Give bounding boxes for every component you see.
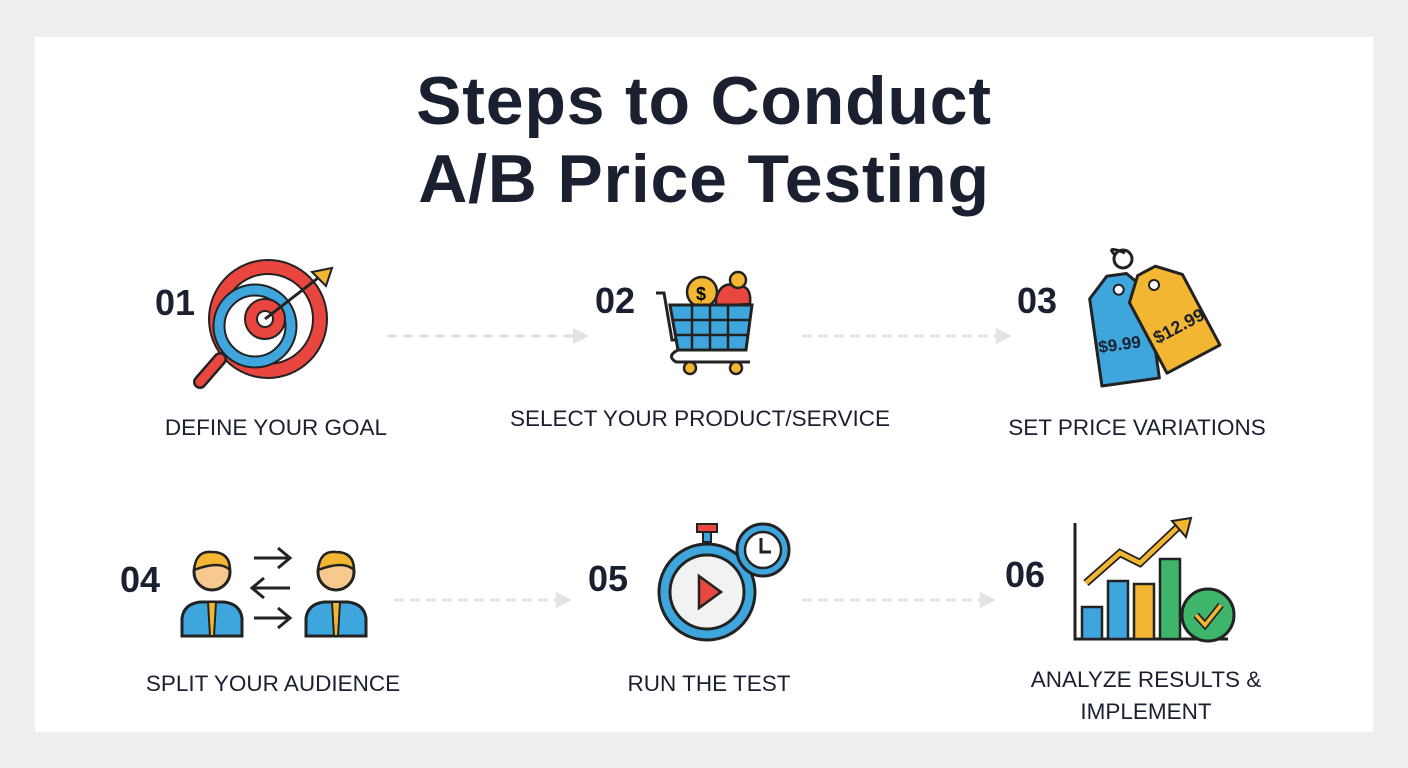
label: IMPLEMENT — [1080, 699, 1212, 724]
number 06: 06 — [1005, 554, 1045, 595]
label: DEFINE YOUR GOAL — [165, 415, 387, 440]
label: RUN THE TEST — [628, 671, 790, 696]
arrow 1 — [387, 328, 588, 344]
icon: target magnifier — [193, 259, 334, 389]
number 05: 05 — [588, 558, 628, 599]
step 05 — [588, 522, 790, 696]
arrow 4 — [802, 592, 996, 608]
icon: bar chart with check — [1074, 516, 1236, 642]
label: ANALYZE RESULTS & — [1031, 667, 1261, 692]
label: SELECT YOUR PRODUCT/SERVICE — [510, 406, 890, 431]
step 04 — [120, 546, 400, 696]
icon: two people with arrows — [180, 546, 368, 638]
number 01: 01 — [155, 282, 195, 323]
step 06 — [1005, 516, 1261, 724]
icon: price tags: $9.99 — [1097, 332, 1142, 357]
title: A/B Price Testing — [418, 141, 990, 217]
label: SET PRICE VARIATIONS — [1008, 415, 1266, 440]
arrow 3 — [394, 592, 572, 608]
title: Steps to Conduct — [416, 63, 992, 139]
icon: cart — [656, 270, 754, 376]
label — [1030, 667, 1261, 724]
arrow 2 — [802, 328, 1012, 344]
number 03: 03 — [1017, 280, 1057, 321]
title — [416, 63, 992, 217]
icon: stopwatch — [658, 522, 790, 642]
icon: price tags: $12.99 — [1150, 304, 1208, 348]
number 02: 02 — [595, 280, 635, 321]
step 03 — [1008, 248, 1266, 440]
number 04: 04 — [120, 559, 160, 600]
step 02 — [510, 270, 890, 431]
step 01 — [155, 259, 387, 440]
icon: price tags — [1088, 248, 1222, 388]
label: SPLIT YOUR AUDIENCE — [146, 671, 400, 696]
icon: cart: $ — [696, 284, 706, 304]
